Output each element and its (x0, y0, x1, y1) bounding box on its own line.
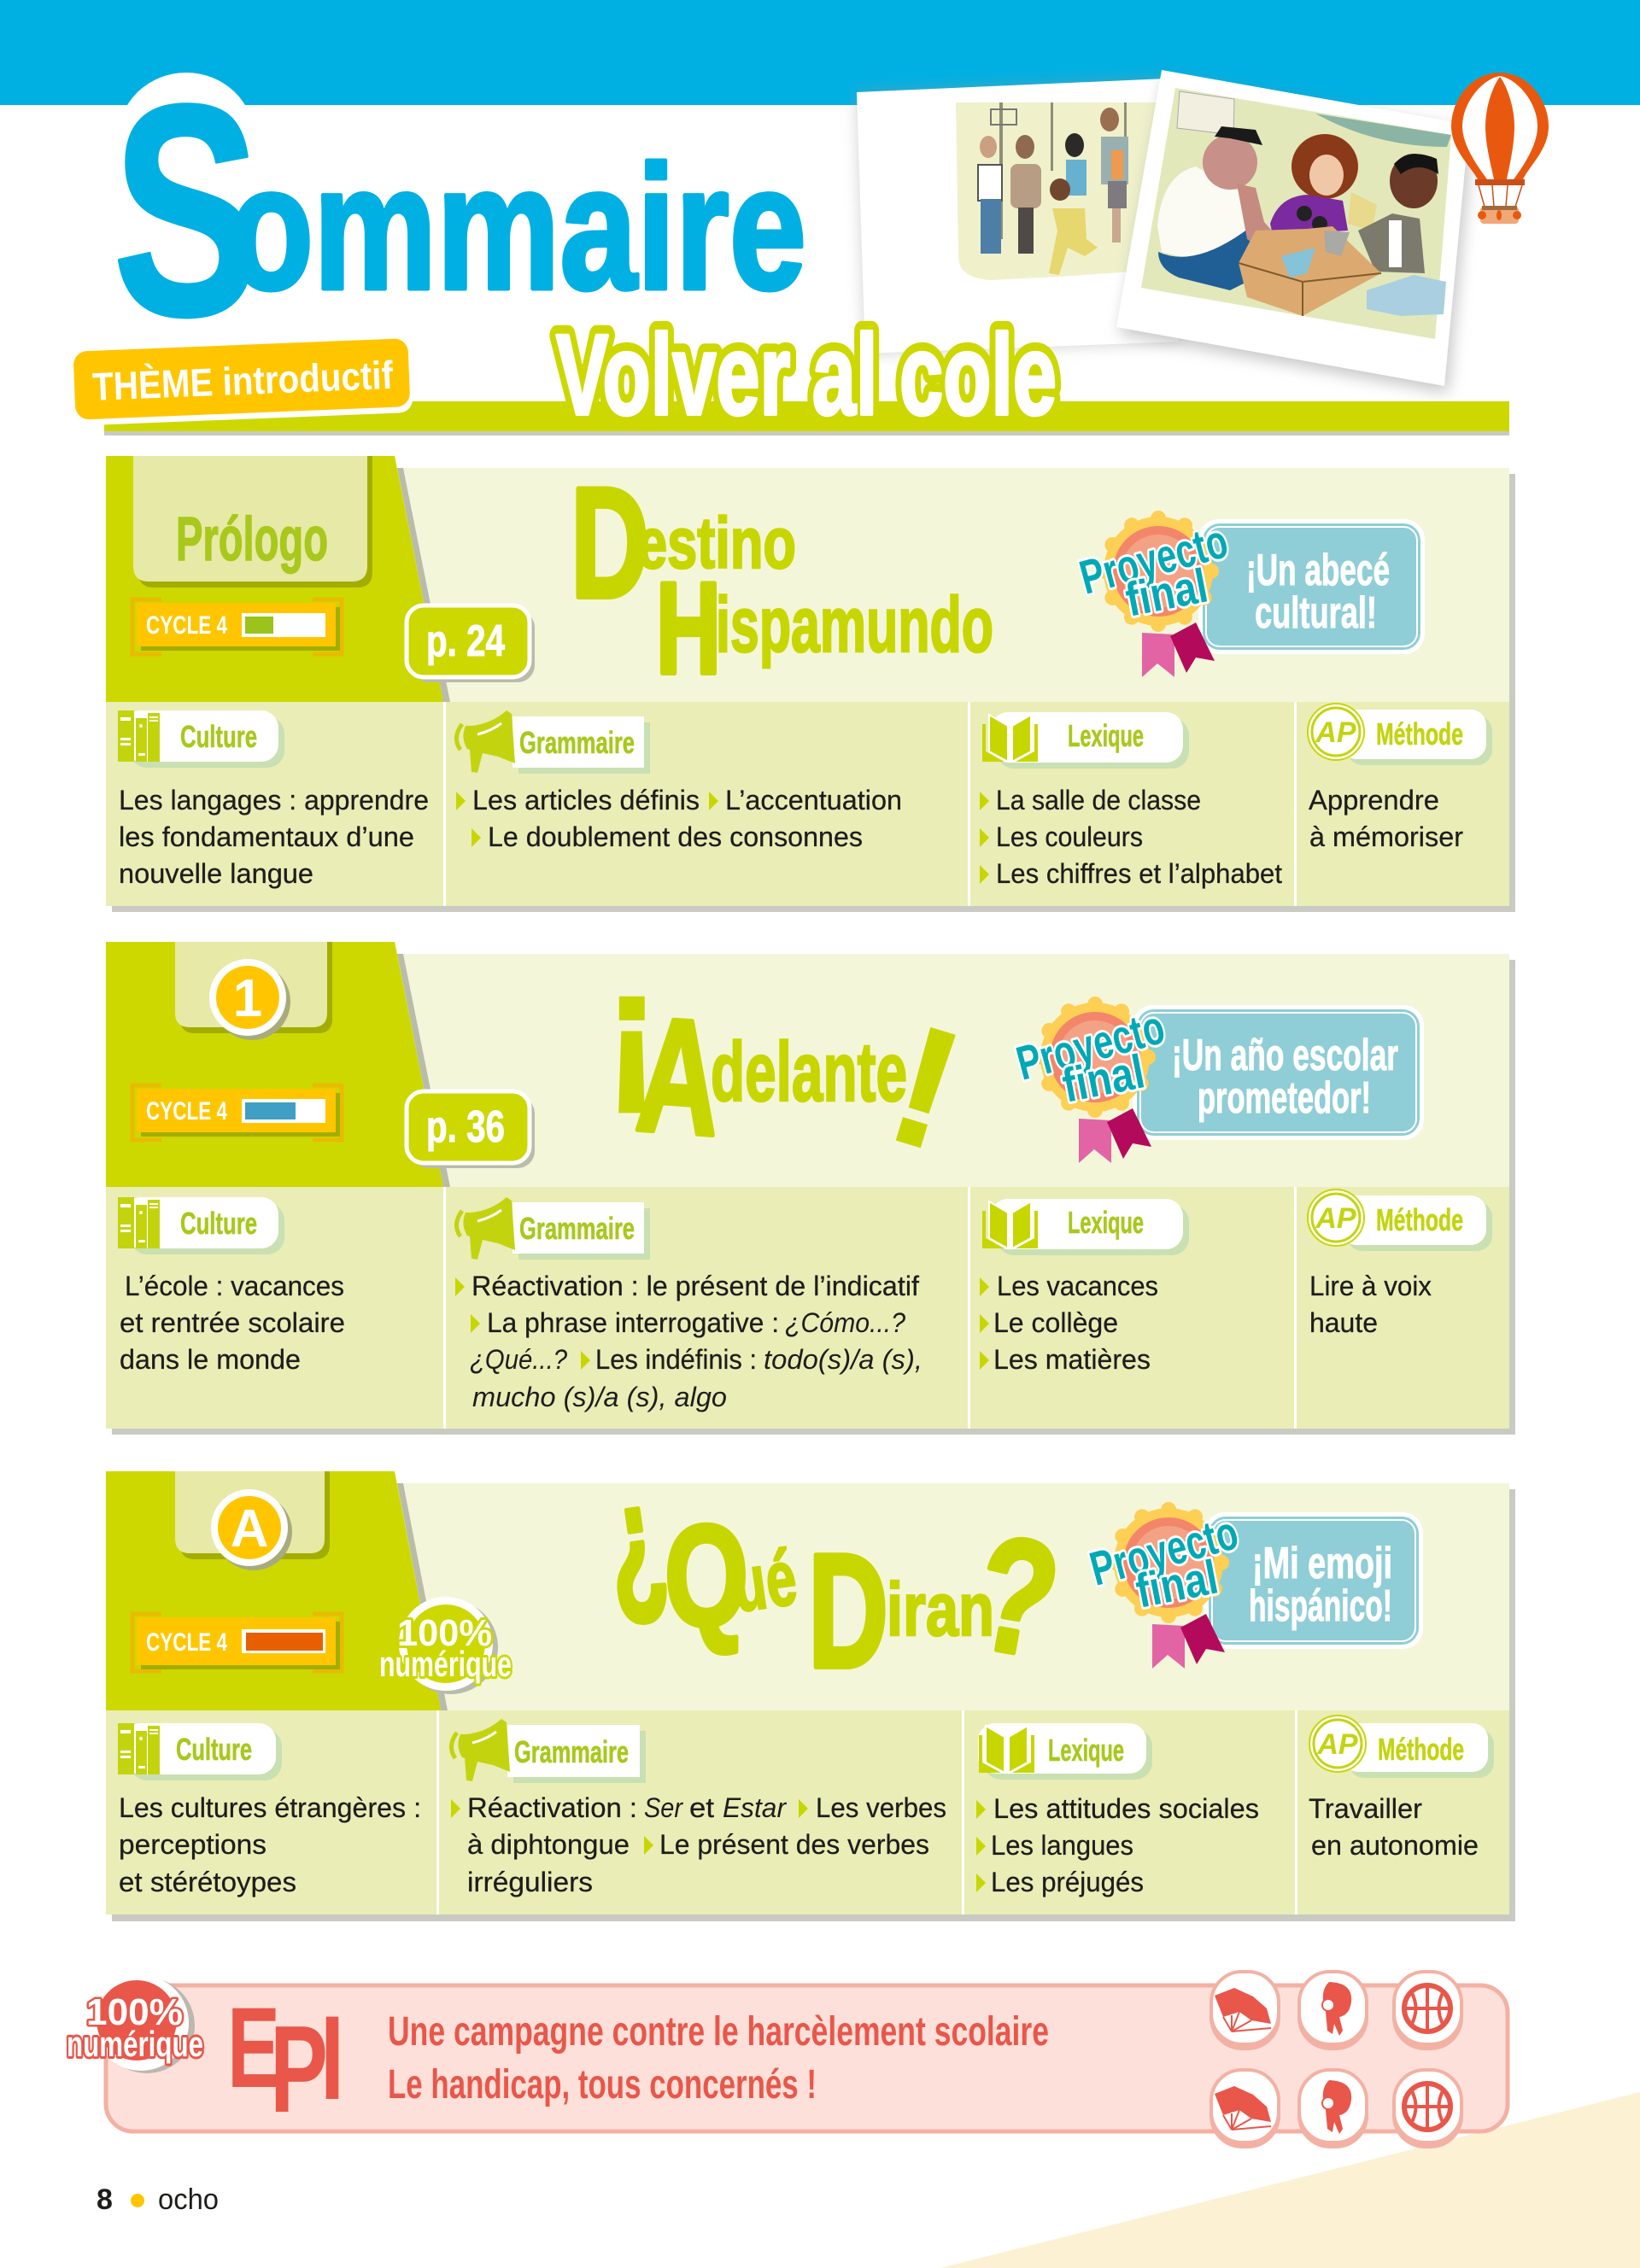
grammar column: Les indéfinis : (595, 1344, 757, 1375)
method column (1309, 1716, 1494, 1861)
photo: students in a corridor (857, 79, 1179, 354)
callout: Proyecto final, Un abecé cultural: Proyecto (1074, 513, 1233, 605)
culture column: Culture (180, 719, 257, 754)
photo: three teenagers with a box (1116, 70, 1473, 393)
grammar column: ¿Qué...? (470, 1344, 567, 1375)
method column: à mémoriser (1309, 821, 1463, 852)
title: Destino Hispamundo: ispamundo (716, 582, 993, 669)
badge: 100% numérique: 100% (397, 1612, 492, 1654)
culture column: L’école : vacances (125, 1271, 344, 1301)
grammar column: Ser (644, 1792, 683, 1823)
tab: number 1 (175, 942, 332, 1040)
title: Qué diran: iran (887, 1567, 994, 1651)
grammar column: Grammaire (519, 1211, 635, 1246)
lexicon column: La salle de classe (996, 785, 1201, 815)
lexicon column: Les vacances (997, 1271, 1158, 1301)
icons: theme pictograms (1210, 1972, 1463, 2148)
EPI topics: Une campagne contre le harcèlement scolaire (388, 2009, 1049, 2055)
panel: Prólogo (106, 454, 1515, 912)
title: Sommaire (113, 42, 806, 378)
heading: EPI: I (320, 1990, 344, 2125)
method column: haute (1309, 1307, 1378, 1338)
background corner shape (940, 2092, 1640, 2268)
tab: letter A: A (231, 1499, 268, 1558)
panel: EPI banner (67, 1972, 1508, 2148)
title: Qué diran: ? (964, 1501, 1071, 1692)
cycle label: CYCLE 4 (146, 1628, 227, 1657)
callout: Proyecto final, Un abecé cultural: final (1122, 558, 1212, 627)
method column: Méthode (1378, 1732, 1464, 1767)
grammar column: à diphtongue (467, 1829, 630, 1860)
title: Sommaire: ommaire (229, 129, 806, 326)
cycle label: CYCLE 4 (146, 1097, 227, 1125)
method column: Travailler (1309, 1793, 1422, 1824)
method column (1308, 704, 1492, 852)
method column: Lire à voix (1309, 1271, 1432, 1301)
culture column: et stérétoypes (119, 1867, 296, 1897)
method column: Méthode (1376, 1202, 1463, 1237)
lexicon column: Les couleurs (996, 821, 1143, 852)
badge: 100% numérique (67, 1975, 203, 2073)
callout: Proyecto final, Mi emoji hispánico: Proyecto (1084, 1505, 1244, 1596)
lexicon column: Le collège (993, 1307, 1118, 1338)
callout: Proyecto final, Mi emoji hispánico: final (1132, 1549, 1222, 1618)
title: Qué diran: ué (727, 1534, 802, 1629)
method column: AP (1315, 716, 1356, 749)
method column: AP (1315, 1202, 1356, 1235)
grammar column: Estar (723, 1792, 787, 1823)
green title bar (104, 401, 1509, 435)
lexicon column: Lexique (1068, 1205, 1144, 1240)
EPI topics: Le handicap, tous concernés ! (388, 2062, 817, 2107)
method column (1308, 1190, 1492, 1338)
lexicon column (980, 1199, 1189, 1375)
culture column (118, 1197, 345, 1375)
grammar column: ¿Cómo...? (785, 1307, 905, 1338)
culture column: dans le monde (120, 1344, 301, 1375)
grammar column (455, 1197, 922, 1412)
panel: unit A Qué diran (106, 1447, 1515, 1921)
grammar column: L’accentuation (725, 785, 902, 815)
culture column: les fondamentaux d’une (119, 821, 414, 852)
page footer (97, 2183, 219, 2216)
icon: hot air balloon (1451, 73, 1549, 224)
heading: EPI: P (270, 2000, 328, 2138)
heading: Volver al cole: Volver al cole (556, 312, 1057, 439)
page reference p. 24 (407, 605, 535, 682)
cycle label (132, 1085, 342, 1140)
grammar column: Réactivation : (467, 1792, 637, 1823)
badge: 100% numérique (379, 1597, 512, 1694)
callout: Proyecto final, Mi emoji hispánico: ¡Mi emoji (1252, 1539, 1392, 1588)
method column: en autonomie (1311, 1830, 1479, 1861)
grammar column: irréguliers (467, 1867, 593, 1897)
heading: Volver al cole (556, 312, 1057, 439)
grammar column (451, 1719, 946, 1897)
method column: Apprendre (1309, 785, 1439, 815)
title: Sommaire: S (113, 42, 260, 378)
culture column: Culture (176, 1732, 252, 1767)
title: Destino Hispamundo (571, 454, 993, 701)
lexicon column: Lexique (1068, 718, 1144, 753)
grammar column: Grammaire (514, 1734, 629, 1769)
grammar column (456, 710, 902, 852)
culture column (118, 710, 429, 889)
top blue band (0, 0, 1640, 105)
heading: Volver al cole: Volver al cole (556, 312, 1057, 439)
cycle label (132, 1614, 342, 1671)
callout: Proyecto final, Mi emoji hispánico (1084, 1505, 1423, 1669)
title: Adelante: ! (871, 989, 981, 1186)
page reference p. 24: p. 24 (426, 617, 505, 666)
lexicon column: Les matières (993, 1344, 1151, 1375)
culture column (118, 1723, 421, 1897)
callout: Proyecto final, Un abecé cultural: ¡Un abecé (1246, 546, 1390, 595)
grammar column: mucho (s)/a (s), algo (472, 1382, 727, 1412)
culture column: Les cultures étrangères : (119, 1792, 421, 1823)
title: Adelante (604, 935, 981, 1186)
badge: thème introductif (73, 338, 413, 426)
grammar column: Le présent des verbes (659, 1829, 929, 1860)
callout: Proyecto final, Un abecé cultural: cultural! (1255, 588, 1377, 638)
grammar column: Les articles définis (472, 785, 700, 815)
title: Qué diran (594, 1447, 1071, 1702)
badge: 100% numérique: numérique (67, 2024, 203, 2064)
title: Sommaire: S (113, 42, 260, 378)
tab: number 1: 1 (233, 969, 262, 1028)
page footer: ocho (158, 2183, 219, 2216)
culture column: Les langages : apprendre (119, 785, 429, 815)
badge: 100% numérique: 100% (86, 1991, 183, 2033)
grammar column: Le doublement des consonnes (488, 821, 863, 852)
callout: Proyecto final, Un año escolar prometedor (1010, 999, 1424, 1163)
title: Destino Hispamundo: H (656, 556, 721, 701)
title: Qué diran: D (808, 1521, 888, 1702)
lexicon column: Les chiffres et l’alphabet (996, 858, 1282, 889)
grammar column: Grammaire (519, 725, 635, 760)
tab: Prólogo: Prólogo (176, 506, 328, 574)
heading: EPI: E (227, 1984, 280, 2112)
callout: Proyecto final, Un año escolar prometedor: Proyecto (1010, 999, 1170, 1090)
method column: Méthode (1376, 716, 1463, 751)
title: Adelante: ¡ (604, 935, 659, 1121)
lexicon column: Les préjugés (991, 1867, 1144, 1897)
tab: Prólogo (133, 456, 372, 587)
culture column: nouvelle langue (119, 858, 313, 889)
culture column: Culture (180, 1206, 257, 1241)
method column: AP (1316, 1728, 1358, 1761)
grammar column: Les verbes (816, 1792, 946, 1823)
page reference p. 36: p. 36 (426, 1102, 505, 1152)
lexicon column: Les langues (991, 1830, 1133, 1861)
callout: Proyecto final, Mi emoji hispánico: hispánico! (1249, 1581, 1392, 1631)
badge: thème introductif: THÈME introductif (91, 353, 395, 409)
lexicon column (980, 712, 1282, 889)
tab: letter A (175, 1471, 330, 1570)
grammar column: La phrase interrogative : (487, 1307, 779, 1338)
callout: Proyecto final, Un año escolar prometedor: final (1058, 1043, 1149, 1113)
grammar column: et (689, 1792, 714, 1823)
title: Qué diran: Q (665, 1495, 748, 1656)
page footer: 8 (97, 2183, 113, 2216)
title: Adelante: A (632, 984, 726, 1170)
callout: Proyecto final, Un año escolar prometedor: ¡Un año escolar (1172, 1031, 1398, 1080)
grammar column: Réactivation : le présent de l’indicatif (472, 1271, 919, 1301)
title: Adelante: delante (711, 1025, 907, 1119)
page reference p. 36 (407, 1091, 535, 1168)
culture column: et rentrée scolaire (120, 1307, 345, 1338)
cycle label (132, 599, 342, 654)
callout: Proyecto final, Un año escolar prometedor: prometedor! (1198, 1073, 1371, 1123)
panel: unit 1 Adelante (106, 935, 1515, 1435)
heading: EPI (227, 1984, 344, 2138)
callout: Proyecto final, Un abecé cultural (1074, 513, 1425, 677)
lexicon column: Les attitudes sociales (993, 1793, 1259, 1824)
lexicon column: Lexique (1048, 1733, 1124, 1768)
badge: 100% numérique: numérique (379, 1644, 512, 1684)
EPI topics (388, 2009, 1049, 2107)
title: Destino Hispamundo: estino (637, 503, 796, 583)
title: Qué diran: ¿ (594, 1447, 676, 1634)
title: Destino Hispamundo: D (571, 454, 649, 630)
cycle label: CYCLE 4 (146, 611, 227, 640)
lexicon column (976, 1723, 1259, 1897)
grammar column: todo(s)/a (s), (764, 1344, 922, 1375)
culture column: perceptions (119, 1829, 266, 1860)
